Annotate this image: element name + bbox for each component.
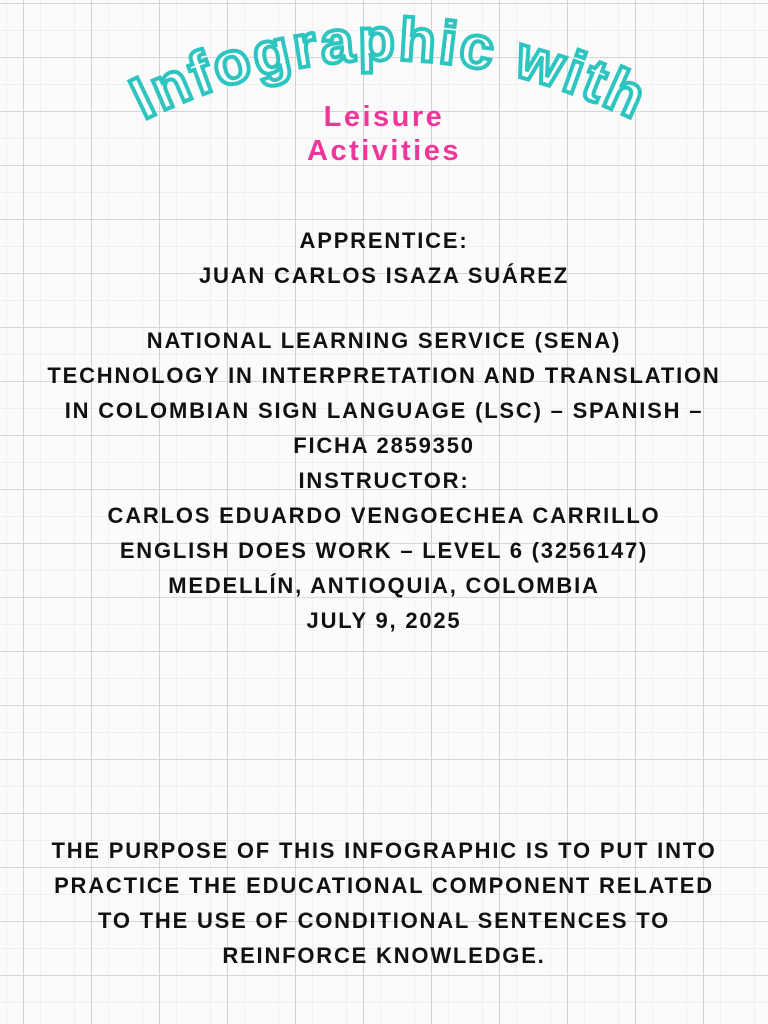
- text block: institution details: [47, 328, 721, 633]
- subtitle: Leisure: [324, 101, 444, 133]
- text block: institution details: TECHNOLOGY IN INTERPRETATION AND TRANSLATION: [47, 363, 721, 388]
- text block: institution details: ENGLISH DOES WORK – LEVEL 6 (3256147): [120, 538, 648, 563]
- subtitle: [307, 101, 461, 167]
- text block: purpose: THE PURPOSE OF THIS INFOGRAPHIC IS TO PUT INTO: [51, 838, 717, 863]
- subtitle: Activities: [307, 135, 461, 167]
- text block: purpose: TO THE USE OF CONDITIONAL SENTENCES TO: [98, 908, 670, 933]
- text block: purpose: REINFORCE KNOWLEDGE.: [222, 943, 546, 968]
- text block: institution details: NATIONAL LEARNING SERVICE (SENA): [147, 328, 621, 353]
- text block: institution details: MEDELLÍN, ANTIOQUIA, COLOMBIA: [168, 573, 600, 598]
- text block: apprentice: JUAN CARLOS ISAZA SUÁREZ: [199, 263, 569, 288]
- text block: institution details: IN COLOMBIAN SIGN LANGUAGE (LSC) – SPANISH –: [65, 398, 703, 423]
- text block: institution details: INSTRUCTOR:: [299, 468, 469, 493]
- text block: institution details: JULY 9, 2025: [307, 608, 461, 633]
- text block: purpose: PRACTICE THE EDUCATIONAL COMPONENT RELATED: [54, 873, 714, 898]
- text block: institution details: FICHA 2859350: [293, 433, 475, 458]
- text block: apprentice: [199, 228, 569, 288]
- text block: institution details: CARLOS EDUARDO VENGOECHEA CARRILLO: [108, 503, 660, 528]
- text block: purpose: [51, 838, 717, 968]
- text block: apprentice: APPRENTICE:: [300, 228, 468, 253]
- title: curved heading: Infographic with: [126, 14, 642, 121]
